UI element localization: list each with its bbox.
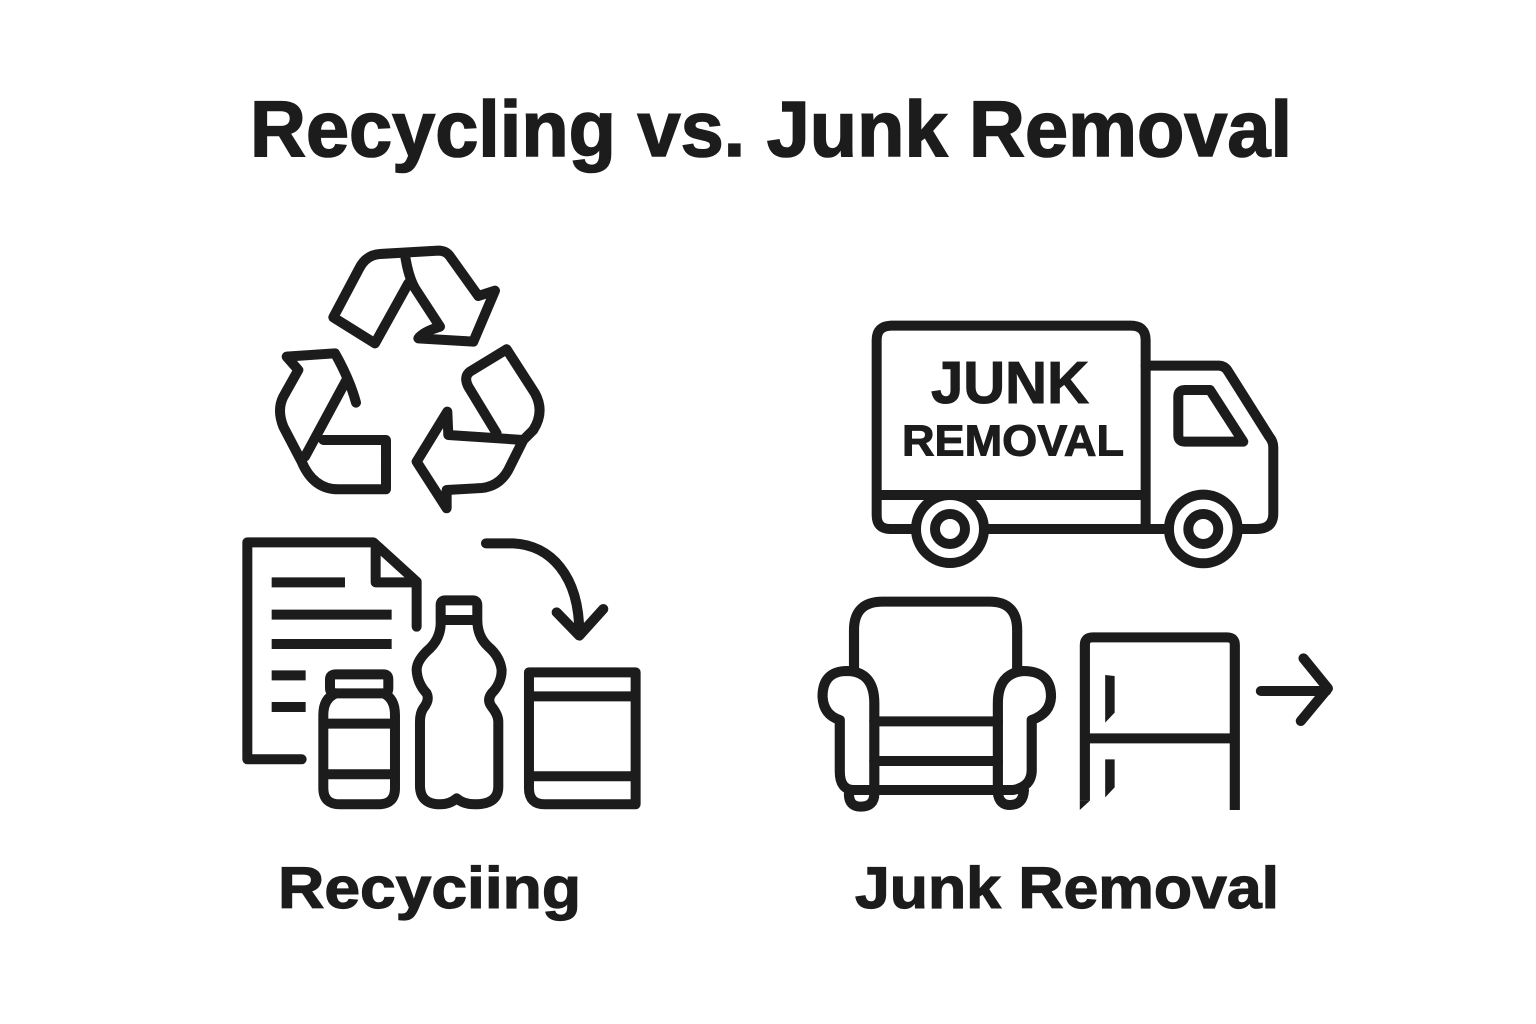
truck box [877,326,1165,529]
front wheel [1169,495,1238,563]
truck text: REMOVAL: REMOVAL [902,416,1124,466]
left arrow [280,353,386,489]
arrow: right [1261,658,1328,721]
icon: junk removal truck [877,326,1273,563]
icon: paper document [247,542,417,759]
icon: plastic bottle [417,600,502,804]
icon: refrigerator [1080,637,1235,810]
truck text: JUNK: JUNK [931,350,1089,416]
icon: can [529,672,636,804]
rear wheel [916,495,984,563]
icon: armchair [823,602,1051,807]
cab window [1178,390,1243,442]
right arrow [417,349,540,508]
label: Recycling: Recyciing [278,856,581,921]
icon: recyclables group [247,542,636,804]
icon: recycling symbol [280,251,540,508]
top arrow [333,251,495,343]
arrow: curved down to bin [486,543,603,636]
icon: jar [323,674,395,804]
icon: junk items group [823,602,1328,810]
label: Junk Removal: Junk Removal [855,856,1279,921]
truck cab [1146,366,1273,529]
box floor line [877,480,1146,510]
title: Recycling vs. Junk Removal [250,84,1292,173]
